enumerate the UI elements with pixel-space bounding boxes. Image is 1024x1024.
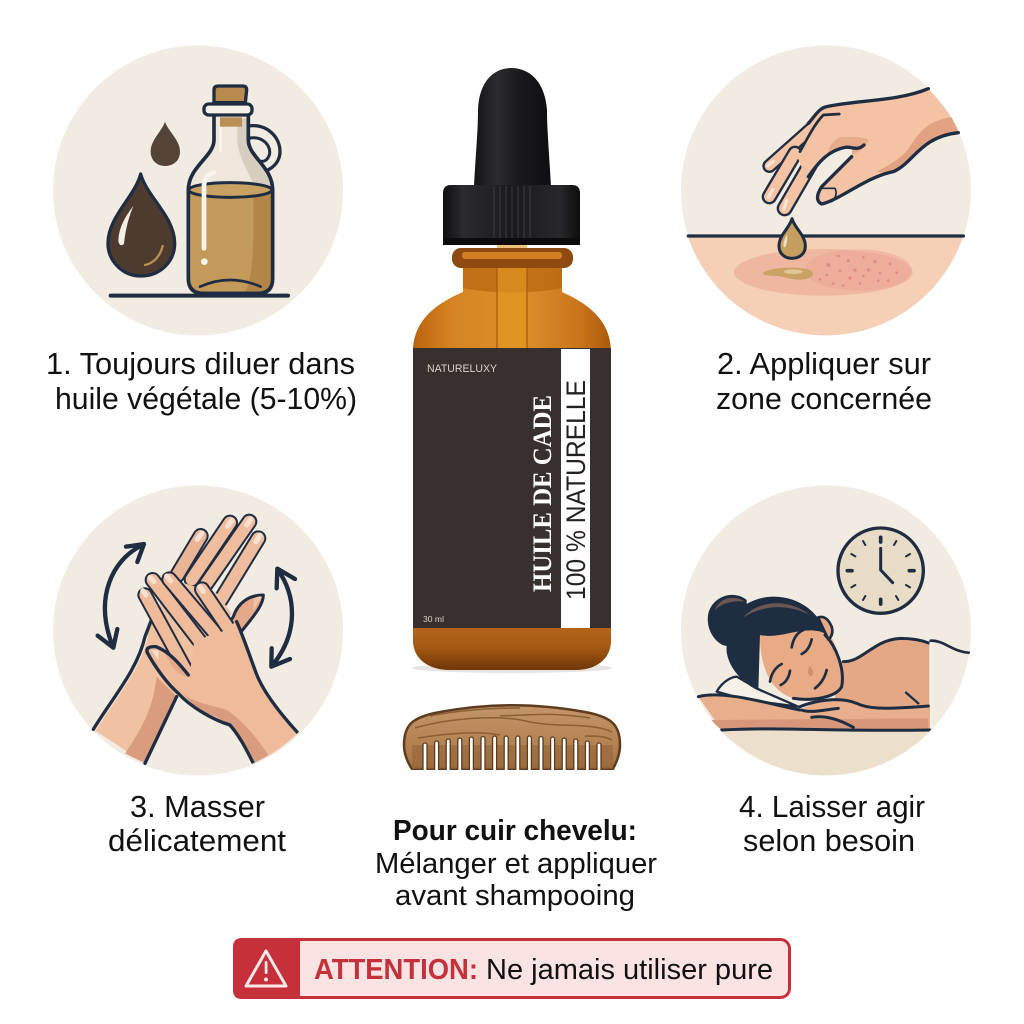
skin surface — [688, 238, 962, 336]
scalp instructions text: Pour cuir chevelu: — [393, 815, 637, 847]
bottle shadow — [412, 663, 612, 673]
banner background — [234, 940, 790, 998]
bottle base — [413, 626, 611, 670]
brand name: NATURELUXY — [427, 363, 498, 375]
circle background 3 — [53, 486, 343, 776]
label step 1: 1. Toujours diluer dans — [46, 347, 355, 381]
icon: back hand — [93, 519, 263, 763]
finger back — [769, 128, 812, 166]
icon: warning triangle — [246, 951, 286, 986]
skin line — [688, 231, 963, 241]
label white stripe — [561, 349, 590, 628]
label step 2: 2. Appliquer sur — [717, 347, 931, 381]
icon: massaging hands with arrows — [93, 519, 298, 763]
icon: wooden comb — [400, 705, 624, 774]
banner text: Ne jamais utiliser pure — [486, 954, 773, 986]
ground line — [111, 290, 288, 302]
dropper cap — [443, 185, 580, 245]
icon: pillow — [717, 677, 798, 707]
icon: small drop — [151, 122, 180, 166]
warning banner — [233, 938, 790, 999]
glass neck detail — [452, 245, 573, 349]
label step 1: huile végétale (5-10%) — [55, 382, 357, 416]
icon: front hand — [143, 576, 298, 763]
banner text: ATTENTION: — [314, 954, 478, 986]
label step 3: délicatement — [108, 824, 287, 858]
scalp instructions text — [375, 815, 658, 912]
icon: glass bottle — [188, 86, 280, 293]
scalp instructions text: avant shampooing — [395, 880, 635, 912]
icon: back and shoulder — [835, 638, 969, 730]
icon: hand — [767, 89, 959, 209]
label step 2: zone concernée — [716, 382, 932, 416]
banner red tab — [233, 938, 300, 999]
panel: step 1 dilute — [46, 46, 357, 416]
volume: 30 ml — [423, 614, 444, 624]
amber glass body — [413, 268, 611, 670]
panel: step 3 massage — [53, 486, 343, 858]
product name: HUILE DE CADE — [528, 395, 557, 592]
label step 4: 4. Laisser agir — [739, 790, 925, 824]
icon: hand dropping oil on skin — [680, 89, 980, 343]
label step 3 — [108, 790, 287, 858]
icon: head and hair — [708, 595, 842, 699]
label step 2 — [716, 347, 932, 416]
natural claim: 100 % NATURELLE — [561, 380, 591, 600]
icon: oil bottle and drops — [108, 86, 288, 296]
label step 4 — [739, 790, 925, 858]
bed — [720, 730, 929, 776]
circle background 2 — [681, 46, 971, 336]
scalp instructions text: Mélanger et appliquer — [375, 848, 658, 880]
dropper bulb — [474, 68, 551, 186]
icon: oil drop — [779, 219, 805, 258]
banner text — [314, 954, 773, 986]
label step 4: selon besoin — [743, 824, 915, 858]
product bottle — [412, 68, 612, 673]
circle background 4 — [681, 486, 971, 776]
label step 1 — [46, 347, 357, 416]
panel: step 2 apply — [680, 46, 980, 416]
bottle label — [413, 348, 611, 628]
panel: step 4 leave — [680, 486, 980, 858]
label step 3: 3. Masser — [130, 790, 265, 824]
circle background 1 — [53, 46, 343, 336]
icon: rotation arrows — [98, 544, 295, 667]
icon: clock — [838, 528, 923, 613]
icon: arm — [698, 695, 930, 730]
icon: sleeping woman with clock — [696, 526, 970, 776]
icon: large drop — [108, 174, 175, 276]
